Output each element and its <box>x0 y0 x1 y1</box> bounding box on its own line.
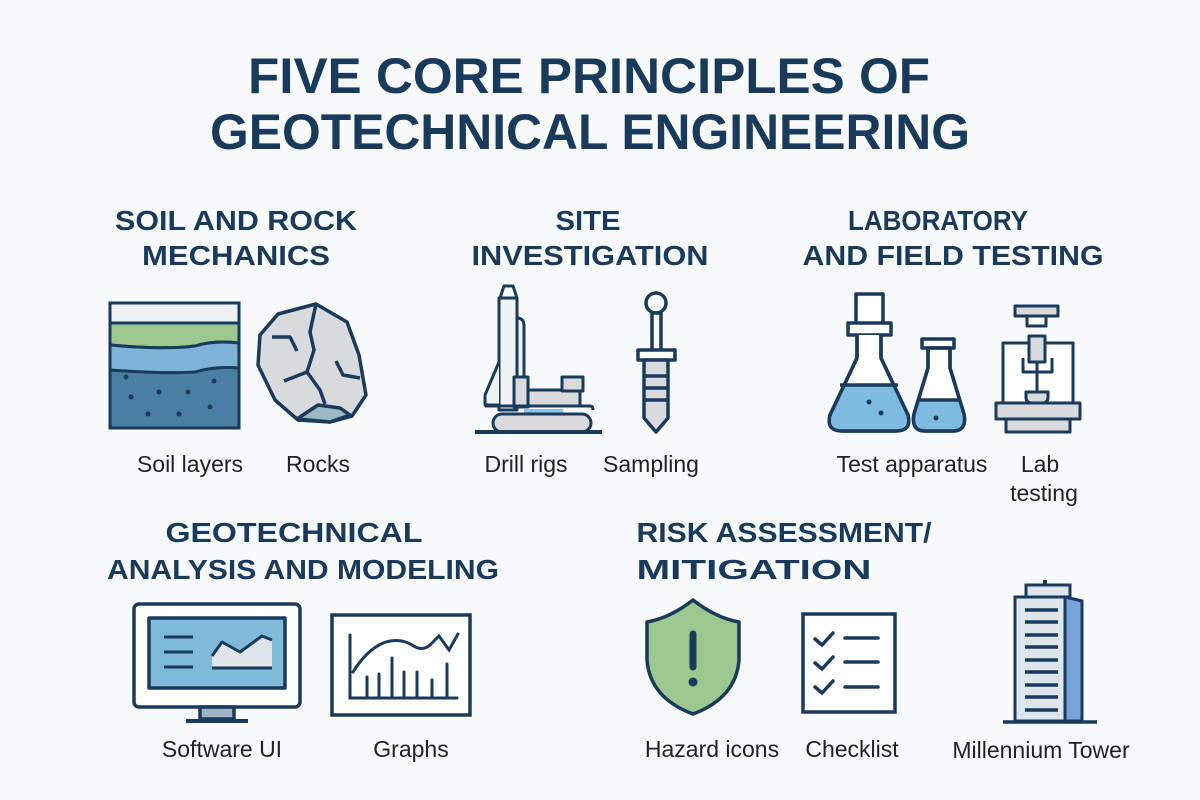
icon: rock <box>258 304 366 422</box>
heading: risk assessment/mitigation: RISK ASSESSMENT/ <box>636 517 932 548</box>
heading: geotechnical analysis and modeling: GEOTECHNICAL <box>166 517 422 548</box>
icon: test apparatus <box>996 306 1080 432</box>
labels row 1 <box>137 451 1078 506</box>
icon: soil layers <box>110 303 239 428</box>
labels row 1: Test apparatus <box>837 451 987 477</box>
heading: soil and rock mechanics <box>115 205 357 271</box>
icon: flasks <box>829 294 965 431</box>
heading: risk assessment/mitigation: MITIGATION <box>636 554 872 585</box>
heading: laboratory and field testing: AND FIELD TESTING <box>802 240 1104 271</box>
labels row 1: testing <box>1010 480 1078 506</box>
labels row 2: Hazard icons <box>645 736 779 762</box>
icon: checklist <box>803 614 895 712</box>
icon: sampling probe <box>638 293 675 432</box>
labels row 2 <box>162 736 1130 763</box>
labels row 1: Drill rigs <box>484 451 568 477</box>
heading: soil and rock mechanics: MECHANICS <box>142 240 330 271</box>
title: GEOTECHNICAL ENGINEERING <box>210 104 970 160</box>
labels row 1: Sampling <box>603 451 699 477</box>
heading: geotechnical analysis and modeling: ANALYSIS AND MODELING <box>107 554 499 585</box>
icon: hazard shield <box>647 600 739 714</box>
heading: site investigation: INVESTIGATION <box>472 240 708 271</box>
heading: soil and rock mechanics: SOIL AND ROCK <box>115 205 357 236</box>
icon: graph <box>332 615 470 715</box>
title <box>210 48 970 160</box>
heading: laboratory and field testing: LABORATORY <box>848 205 1028 236</box>
labels row 2: Graphs <box>373 736 449 762</box>
heading: site investigation: SITE <box>556 205 620 236</box>
icon: drill rig <box>475 286 602 432</box>
heading: laboratory and field testing <box>802 205 1104 271</box>
title: FIVE CORE PRINCIPLES OF <box>248 48 930 104</box>
labels row 2: Software UI <box>162 736 282 762</box>
heading: geotechnical analysis and modeling <box>107 517 499 585</box>
labels row 1: Lab <box>1021 451 1059 477</box>
labels row 2: Millennium Tower <box>952 737 1130 763</box>
heading: risk assessment/mitigation <box>636 517 932 585</box>
labels row 2: Checklist <box>805 736 899 762</box>
labels row 1: Soil layers <box>137 451 243 477</box>
icon: software monitor <box>134 604 300 721</box>
labels row 1: Rocks <box>286 451 350 477</box>
icon: millennium tower <box>1003 580 1097 722</box>
heading: site investigation <box>472 205 708 271</box>
